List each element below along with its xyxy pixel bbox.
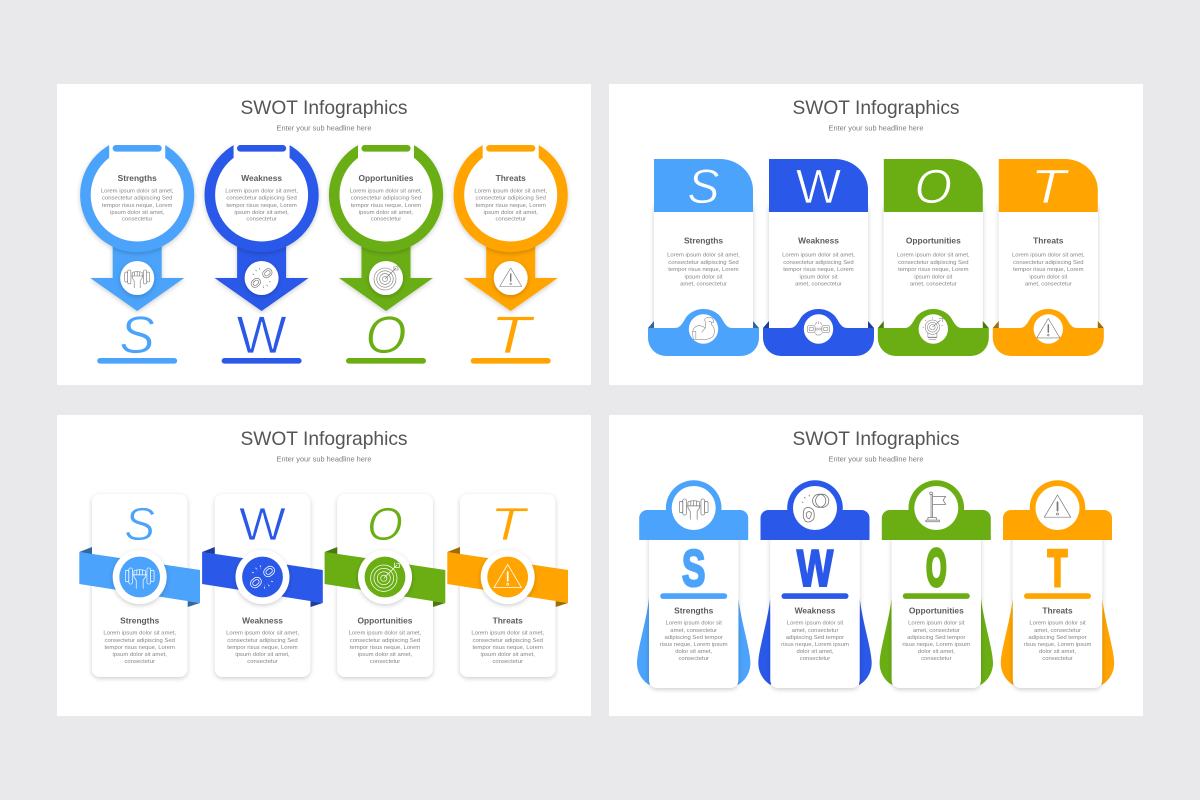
- description: adipiscing Sed tempor: [907, 635, 965, 641]
- description: consectetur: [800, 656, 830, 662]
- description: Lorem ipsum dolor sit: [908, 621, 965, 627]
- description: Lorem ipsum dolor sit: [1029, 621, 1086, 627]
- description: ipsum dolor sit: [914, 274, 953, 280]
- description: amet, consectetur: [913, 628, 960, 634]
- label: Strengths: [674, 605, 714, 615]
- description: consectetur adipiscing Sed: [102, 196, 172, 202]
- icon: dumbbell: [113, 550, 167, 604]
- card body: [654, 205, 753, 330]
- letter W: W: [237, 306, 287, 365]
- description: Lorem ipsum dolor sit: [666, 621, 722, 627]
- description: amet, consectetur: [910, 282, 957, 288]
- column: Threats: [993, 159, 1104, 356]
- description: consectetur adipiscing Sed: [783, 260, 854, 266]
- letter O: O: [367, 498, 403, 550]
- description: dolor sit amet,: [1039, 649, 1076, 655]
- description: consectetur adipiscing Sed: [350, 638, 420, 644]
- side wings: [637, 598, 750, 685]
- description: amet, consectetur: [1034, 628, 1081, 634]
- description: tempor risus neque, Lorem: [475, 203, 546, 209]
- description: ipsum dolor sit amet,: [235, 652, 290, 658]
- description: Lorem ipsum dolor sit amet,: [1012, 253, 1085, 259]
- column: Opportunities: [878, 159, 989, 356]
- description: tempor risus neque, Lorem: [783, 267, 854, 273]
- description: ipsum dolor sit: [800, 274, 838, 280]
- label: Weakness: [242, 615, 283, 625]
- arrow: [90, 240, 184, 311]
- heading: SWOT Infographics: [792, 98, 960, 119]
- description: amet, consectetur: [680, 282, 727, 288]
- icon: warning: [494, 261, 528, 295]
- base tab: [763, 309, 874, 356]
- description: consectetur adipiscing Sed: [351, 196, 421, 202]
- description: risus neque, Lorem ipsum: [660, 642, 728, 648]
- base tab: [993, 309, 1104, 356]
- ring: [334, 134, 438, 247]
- panel: circular arrows SWOT: [57, 84, 591, 385]
- description: Lorem ipsum dolor sit amet,: [474, 188, 547, 194]
- description: ipsum dolor sit amet,: [234, 210, 289, 216]
- description: Lorem ipsum dolor sit amet,: [103, 631, 176, 637]
- description: tempor risus neque, Lorem: [102, 203, 172, 209]
- card: [460, 494, 555, 677]
- card: [337, 494, 433, 677]
- column: Strengths: [637, 480, 750, 688]
- header with icon: broken chain: [760, 480, 870, 540]
- panel: ribbon cards SWOT: [57, 415, 591, 716]
- card: [892, 535, 981, 688]
- description: ipsum dolor sit: [685, 274, 723, 280]
- letter T: T: [490, 305, 536, 364]
- description: consectetur: [122, 217, 152, 223]
- subheading: Enter your sub headline here: [829, 124, 923, 132]
- description: Lorem ipsum dolor sit: [787, 621, 844, 627]
- description: ipsum dolor sit amet,: [358, 652, 413, 658]
- arrow: [215, 240, 309, 311]
- column: Weakness: [202, 494, 323, 677]
- column: Opportunities: [334, 134, 438, 365]
- description: dolor sit amet,: [675, 649, 713, 655]
- description: Lorem ipsum dolor sit amet,: [349, 631, 422, 637]
- arrow: [464, 240, 558, 311]
- arrow: [339, 240, 433, 311]
- card: [1013, 535, 1102, 688]
- description: consectetur adipiscing Sed: [104, 638, 175, 644]
- ring: [85, 134, 189, 247]
- card: [649, 535, 738, 688]
- label: Opportunities: [906, 235, 961, 245]
- letter O: O: [365, 306, 407, 365]
- description: Lorem ipsum dolor sit amet,: [471, 631, 544, 637]
- description: dolor sit amet,: [918, 649, 955, 655]
- heading: SWOT Infographics: [240, 429, 408, 450]
- underline: [660, 593, 727, 599]
- description: ipsum dolor sit amet,: [359, 210, 414, 216]
- icon: broken chain: [236, 550, 290, 604]
- label: Weakness: [798, 235, 839, 245]
- ribbon: [79, 547, 200, 607]
- column: Threats: [1001, 480, 1114, 688]
- subheading: Enter your sub headline here: [277, 124, 371, 132]
- description: consectetur: [124, 659, 155, 665]
- description: ipsum dolor sit amet,: [113, 652, 167, 658]
- description: Lorem ipsum dolor sit amet,: [225, 188, 298, 194]
- description: risus neque, Lorem ipsum: [1024, 642, 1091, 648]
- description: consectetur: [678, 656, 709, 662]
- ring: [459, 134, 562, 247]
- card: [92, 494, 187, 677]
- description: consectetur adipiscing Sed: [227, 638, 298, 644]
- description: consectetur adipiscing Sed: [475, 196, 546, 202]
- underline: [97, 358, 177, 364]
- description: consectetur: [1042, 656, 1073, 662]
- description: adipiscing Sed tempor: [1028, 635, 1087, 641]
- side wings: [758, 598, 872, 685]
- ribbon: [202, 547, 323, 607]
- letter T: T: [490, 499, 529, 551]
- label: Threats: [1042, 605, 1073, 615]
- icon: chain links: [804, 314, 833, 344]
- letter S: S: [124, 498, 155, 550]
- letter tab: [999, 159, 1098, 212]
- label: Weakness: [795, 605, 836, 615]
- subheading: Enter your sub headline here: [277, 454, 371, 464]
- heading: SWOT Infographics: [792, 429, 960, 450]
- description: tempor risus neque, Lorem: [472, 645, 543, 651]
- label: Opportunities: [359, 173, 414, 183]
- card body: [769, 205, 868, 330]
- label: Strengths: [684, 235, 723, 245]
- header with icon: dumbbell: [639, 480, 748, 540]
- header with icon: warning: [1003, 480, 1112, 540]
- icon: warning: [1034, 314, 1063, 344]
- description: consectetur adipiscing Sed: [668, 260, 739, 266]
- description: risus neque, Lorem ipsum: [902, 642, 970, 648]
- letter W: W: [797, 539, 834, 597]
- description: Lorem ipsum dolor sit amet,: [782, 253, 855, 259]
- description: consectetur: [247, 659, 278, 665]
- description: consectetur adipiscing Sed: [1013, 260, 1084, 266]
- icon: broken chain: [245, 261, 279, 295]
- letter tab: [884, 159, 983, 212]
- header with icon: flag: [882, 480, 991, 540]
- description: consectetur: [495, 217, 526, 223]
- description: tempor risus neque, Lorem: [350, 645, 420, 651]
- letter O: O: [915, 161, 952, 214]
- label: Threats: [496, 173, 526, 183]
- description: amet, consectetur: [795, 282, 842, 288]
- label: Strengths: [118, 173, 157, 183]
- description: Lorem ipsum dolor sit amet,: [101, 188, 174, 194]
- base tab: [878, 309, 989, 356]
- column: Threats: [447, 494, 568, 677]
- description: adipiscing Sed tempor: [665, 635, 723, 641]
- underline: [346, 358, 426, 364]
- ribbon: [325, 547, 445, 607]
- label: Weakness: [241, 173, 282, 183]
- column: Strengths: [79, 494, 200, 677]
- description: tempor risus neque, Lorem: [226, 203, 297, 209]
- panel: header cards SWOT: [609, 415, 1143, 716]
- icon: dumbbell: [120, 261, 154, 295]
- description: consectetur: [246, 217, 277, 223]
- description: risus neque, Lorem ipsum: [781, 642, 849, 648]
- label: Threats: [1033, 235, 1064, 245]
- underline: [471, 358, 551, 364]
- label: Strengths: [120, 615, 160, 625]
- ring: [210, 134, 313, 247]
- description: Lorem ipsum dolor sit amet,: [667, 253, 740, 259]
- description: consectetur: [371, 217, 401, 223]
- letter O: O: [926, 539, 946, 597]
- description: Lorem ipsum dolor sit amet,: [897, 253, 970, 259]
- description: amet, consectetur: [670, 628, 717, 634]
- column: Opportunities: [325, 494, 445, 677]
- letter tab: [654, 159, 753, 212]
- card: [215, 494, 310, 677]
- icon: target: [369, 261, 403, 295]
- underline: [903, 593, 970, 599]
- letter S: S: [682, 540, 705, 598]
- underline: [782, 593, 848, 599]
- panel: tabbed cards SWOT: [609, 84, 1143, 385]
- description: Lorem ipsum dolor sit amet,: [226, 631, 299, 637]
- side wings: [1001, 598, 1114, 685]
- letter W: W: [239, 500, 287, 551]
- description: adipiscing Sed tempor: [786, 635, 844, 641]
- column: Strengths: [85, 134, 189, 365]
- column: Threats: [459, 134, 562, 364]
- description: consectetur: [492, 659, 523, 665]
- description: amet, consectetur: [792, 628, 838, 634]
- label: Opportunities: [358, 615, 413, 625]
- icon: flexed arm: [689, 314, 718, 344]
- column: Strengths: [648, 159, 759, 356]
- description: tempor risus neque, Lorem: [351, 203, 421, 209]
- letter S: S: [687, 161, 720, 214]
- letter T: T: [1048, 540, 1067, 598]
- heading: SWOT Infographics: [240, 98, 408, 119]
- side wings: [880, 598, 993, 685]
- description: consectetur adipiscing Sed: [472, 638, 543, 644]
- description: Lorem ipsum dolor sit amet,: [350, 188, 423, 194]
- description: ipsum dolor sit: [1029, 274, 1068, 280]
- description: consectetur: [370, 659, 400, 665]
- subheading: Enter your sub headline here: [829, 454, 923, 464]
- description: tempor risus neque, Lorem: [668, 267, 739, 273]
- underline: [1024, 593, 1091, 599]
- column: Weakness: [758, 480, 872, 688]
- description: tempor risus neque, Lorem: [898, 267, 969, 273]
- description: consectetur adipiscing Sed: [226, 196, 297, 202]
- description: tempor risus neque, Lorem: [104, 645, 175, 651]
- label: Threats: [493, 615, 523, 625]
- letter tab: [769, 159, 868, 212]
- underline: [222, 358, 302, 364]
- description: tempor risus neque, Lorem: [1013, 267, 1084, 273]
- description: ipsum dolor sit amet,: [484, 210, 538, 216]
- column: Weakness: [210, 134, 313, 365]
- card: [770, 535, 860, 688]
- column: Weakness: [763, 159, 874, 356]
- description: dolor sit amet,: [796, 649, 834, 655]
- card body: [999, 205, 1098, 330]
- letter W: W: [796, 161, 842, 214]
- base tab: [648, 309, 759, 356]
- icon: target: [358, 550, 412, 604]
- letter S: S: [120, 306, 155, 365]
- label: Opportunities: [909, 605, 964, 615]
- card body: [884, 205, 983, 330]
- description: ipsum dolor sit amet,: [481, 652, 535, 658]
- icon: idea bulb: [919, 314, 948, 344]
- description: consectetur adipiscing Sed: [898, 260, 969, 266]
- description: amet, consectetur: [1025, 282, 1072, 288]
- description: ipsum dolor sit amet,: [110, 210, 165, 216]
- description: tempor risus neque, Lorem: [227, 645, 298, 651]
- letter T: T: [1031, 160, 1070, 214]
- ribbon: [447, 547, 568, 607]
- icon: warning: [481, 550, 535, 604]
- column: Opportunities: [880, 480, 993, 688]
- description: consectetur: [921, 656, 952, 662]
